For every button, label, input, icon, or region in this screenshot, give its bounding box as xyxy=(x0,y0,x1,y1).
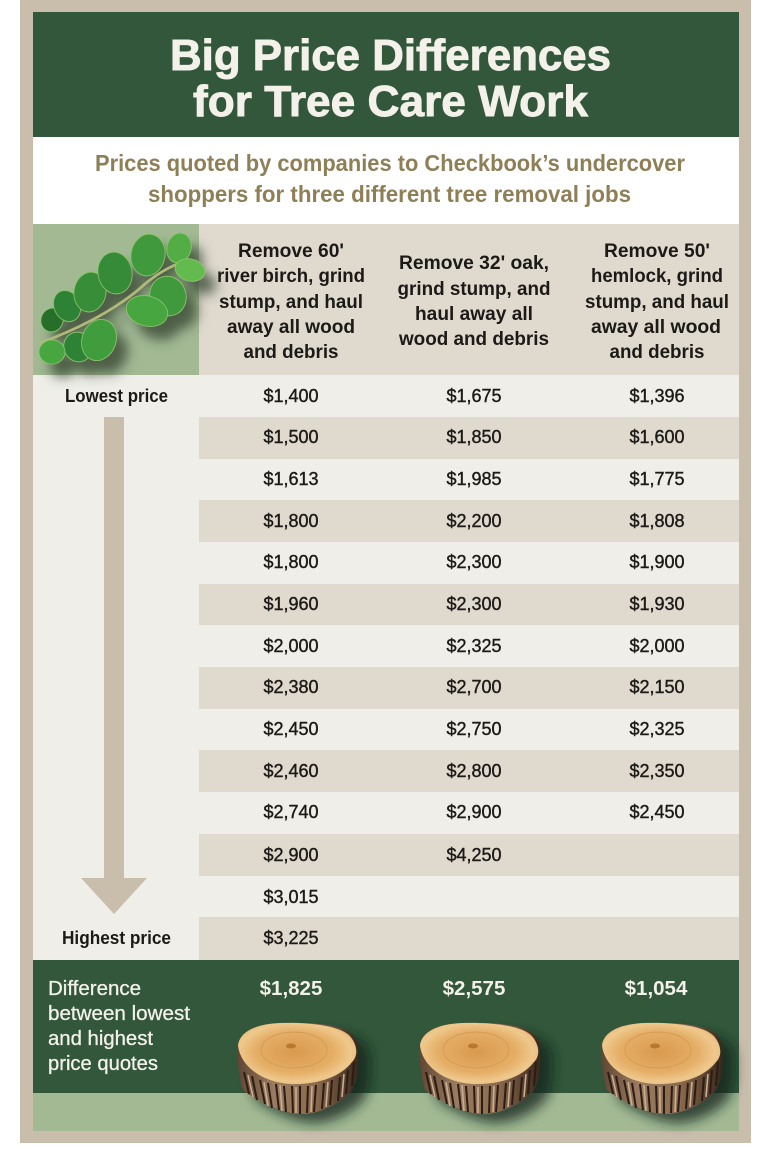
price column 3: $1,396 xyxy=(629,386,685,406)
price column 2: $2,900 xyxy=(446,802,502,822)
price column 2: $2,325 xyxy=(446,636,502,656)
price column 2: $1,850 xyxy=(446,427,502,447)
price column 3: $2,325 xyxy=(629,719,685,739)
price column 2: $1,985 xyxy=(446,469,502,489)
difference label: Difference xyxy=(48,978,141,1000)
title xyxy=(170,31,611,126)
price column 3: $1,775 xyxy=(629,469,685,489)
price column 2 xyxy=(446,386,502,865)
price column 2: $4,250 xyxy=(446,845,502,865)
price column 2: $2,750 xyxy=(446,719,502,739)
column 2 header: grind stump, and xyxy=(398,279,550,300)
difference values xyxy=(260,977,688,1000)
difference label xyxy=(48,978,190,1075)
arrow: lowest to highest xyxy=(81,417,147,914)
price column 2: $2,800 xyxy=(446,761,502,781)
column header row xyxy=(199,224,739,375)
icon: tree stump 2 xyxy=(419,1023,540,1114)
column 1 header: and debris xyxy=(244,342,338,363)
column 2 header: Remove 32' oak, xyxy=(399,253,549,274)
price column 1: $2,460 xyxy=(263,761,319,781)
difference label: price quotes xyxy=(48,1053,158,1075)
column 3 header: hemlock, grind xyxy=(591,266,723,287)
subtitle panel: shoppers for three different tree removal jobs xyxy=(148,181,631,207)
price column 3 xyxy=(629,386,685,822)
price column 2: $1,675 xyxy=(446,386,502,406)
price column 2: $2,200 xyxy=(446,511,502,531)
difference values: $1,054 xyxy=(625,977,688,1000)
difference values: $1,825 xyxy=(260,977,322,1000)
price column 3: $2,000 xyxy=(629,636,685,656)
price column 1: $1,800 xyxy=(263,552,319,572)
subtitle panel xyxy=(33,137,739,224)
column 2 header: wood and debris xyxy=(398,329,549,350)
column 3 header xyxy=(585,241,729,363)
title: Big Price Differences xyxy=(170,31,611,80)
price column 3: $1,600 xyxy=(629,427,685,447)
price column 1: $2,740 xyxy=(263,802,319,822)
price column 1: $3,015 xyxy=(263,887,319,907)
price column 2: $2,300 xyxy=(446,552,502,572)
column 3 header: Remove 50' xyxy=(604,241,710,262)
subtitle panel: Prices quoted by companies to Checkbook’s undercover xyxy=(95,150,685,176)
title: for Tree Care Work xyxy=(193,77,589,126)
footer panel: difference xyxy=(33,960,739,1131)
table body background xyxy=(33,375,739,960)
highest price label: Highest price xyxy=(62,928,171,948)
column 2 header: haul away all xyxy=(415,304,533,325)
price column 1: $1,400 xyxy=(263,386,319,406)
price column 1: $2,900 xyxy=(263,845,319,865)
price column 3: $1,930 xyxy=(629,594,685,614)
difference values: $2,575 xyxy=(443,977,505,1000)
column 1 header: stump, and haul xyxy=(219,292,363,313)
icon: tree stump 1 xyxy=(237,1023,358,1114)
price column 1: $2,000 xyxy=(263,636,319,656)
price column 3: $2,350 xyxy=(629,761,685,781)
price column 1: $2,450 xyxy=(263,719,319,739)
price column 2: $2,700 xyxy=(446,677,502,697)
difference label: between lowest xyxy=(48,1003,190,1025)
price column 1: $1,800 xyxy=(263,511,319,531)
column 3 header: and debris xyxy=(610,342,704,363)
price column 1: $2,380 xyxy=(263,677,319,697)
price column 3: $2,150 xyxy=(629,677,685,697)
column 1 header xyxy=(217,241,365,363)
price column 3: $2,450 xyxy=(629,802,685,822)
price column 1: $1,613 xyxy=(263,469,319,489)
price column 2: $2,300 xyxy=(446,594,502,614)
icon: tree stump 3 xyxy=(601,1023,722,1114)
column 1 header: Remove 60' xyxy=(238,241,344,262)
column 1 header: river birch, grind xyxy=(217,266,365,287)
title banner xyxy=(33,12,739,137)
price column 3: $1,900 xyxy=(629,552,685,572)
price column 1: $1,960 xyxy=(263,594,319,614)
icon: leafy branch xyxy=(38,230,207,367)
price column 1 xyxy=(263,386,319,948)
lowest price label: Lowest price xyxy=(65,386,168,406)
column 3 header: stump, and haul xyxy=(585,292,729,313)
price column 1: $3,225 xyxy=(263,928,319,948)
price column 1: $1,500 xyxy=(263,427,319,447)
leaf panel xyxy=(33,224,199,375)
difference label: and highest xyxy=(48,1028,153,1050)
column 1 header: away all wood xyxy=(227,317,355,338)
price column 3: $1,808 xyxy=(629,511,685,531)
column 3 header: away all wood xyxy=(591,317,721,338)
column 2 header xyxy=(398,253,550,350)
